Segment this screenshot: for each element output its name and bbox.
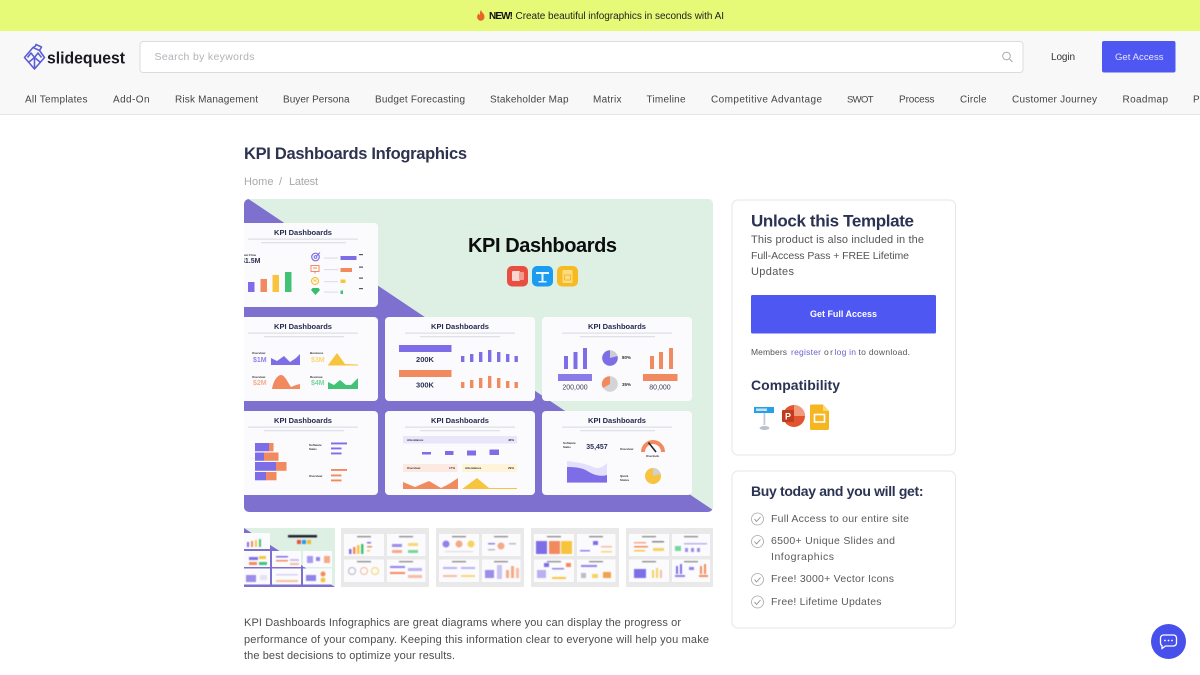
card: progress bars: [385, 317, 535, 401]
get full access button: [751, 295, 936, 334]
card: bars and pies: 80,000: [649, 384, 671, 392]
category navigation: All Templates: [25, 94, 88, 106]
logo: [24, 44, 125, 69]
benefit: lifetime updates: Free! Lifetime Updates: [771, 596, 882, 608]
panel: unlock this template: Unlock this Template: [751, 212, 914, 230]
category navigation: Risk Management: [175, 94, 258, 106]
card: gauge and area chart: Quick: [620, 474, 629, 478]
thumbnail 1: [244, 528, 335, 587]
icon: presentation: [311, 266, 319, 274]
unlock description: Full-Access Pass + FREE Lifetime: [751, 250, 909, 262]
thumbnail 2: [341, 528, 429, 587]
icon: powerpoint: [782, 405, 805, 427]
announcement banner: [0, 0, 1200, 31]
card: bar chart and icons: [236, 223, 378, 307]
main preview image: [236, 196, 713, 512]
card: attendance: 48%: [508, 438, 514, 442]
category navigation: Stakeholder Map: [490, 94, 569, 106]
benefit: slides: Infographics: [771, 551, 834, 563]
card: bar chart and icons: KPI Dashboards: [274, 228, 332, 237]
icon: gem: [311, 288, 320, 295]
breadcrumb: [244, 176, 318, 188]
announcement banner: Create beautiful infographics in seconds with AI: [516, 11, 724, 22]
unlock description: This product is also included in the: [751, 234, 924, 246]
category navigation: Circle: [960, 94, 987, 106]
card: gauge and area chart: Sales: [563, 445, 571, 449]
card: stacked bars: KPI Dashboards: [274, 416, 332, 425]
thumbnail 3: [436, 528, 524, 587]
card: stacked bars: [236, 411, 378, 495]
category navigation: SWOT: [847, 94, 874, 106]
card: gauge and area chart: [542, 411, 692, 495]
benefit: slides: [752, 535, 895, 563]
card: gauge and area chart: Software: [563, 441, 576, 445]
get access button: [1102, 41, 1176, 72]
gauge: [643, 442, 663, 458]
category navigation: Timeline: [646, 94, 686, 106]
card: attendance: 17%: [449, 466, 455, 470]
icon: target: [312, 252, 320, 261]
chat button: [1151, 624, 1186, 659]
members note: [751, 347, 910, 357]
get access button: Get Access: [1115, 52, 1164, 63]
card: gauge and area chart: Status: [620, 478, 630, 482]
members note: register: [791, 347, 821, 357]
unlock description: Updates: [751, 266, 794, 278]
card: area charts: $2M: [253, 380, 267, 387]
category navigation: Matrix: [593, 94, 622, 106]
card: gauge and area chart: Overview: [620, 447, 634, 451]
site header: [0, 31, 1200, 115]
card: area charts: KPI Dashboards: [274, 322, 332, 331]
panel: unlock this template: [732, 200, 956, 455]
logo: slidequest: [47, 50, 125, 68]
card: bars and pies: KPI Dashboards: [588, 322, 646, 331]
gauge: Overlook: [646, 454, 659, 458]
members note: log in: [834, 347, 856, 357]
card: bar chart and icons: ast Flow: [244, 253, 257, 257]
page title: KPI Dashboards Infographics: [244, 145, 467, 163]
card: area charts: $1M: [253, 357, 267, 364]
card: attendance: Attendance: [407, 438, 424, 442]
search box: Search by keywords: [154, 51, 254, 63]
benefit: vector icons: Free! 3000+ Vector Icons: [771, 573, 894, 585]
category navigation: Budget Forecasting: [375, 94, 465, 106]
app icons: [507, 266, 578, 286]
members note: or: [824, 347, 833, 357]
card: bars and pies: 80%: [622, 355, 631, 360]
search box: [140, 42, 1023, 72]
card: gauge and area chart: 35,457: [586, 444, 608, 451]
thumbnail 5: [626, 528, 713, 587]
category navigation: [25, 94, 1200, 106]
card: attendance: 29%: [508, 466, 514, 470]
card: attendance: KPI Dashboards: [431, 416, 489, 425]
card: area charts: Revenue: [310, 375, 323, 379]
icon: medal: [312, 278, 318, 284]
card: area charts: Business: [310, 351, 324, 355]
compatibility heading: Compatibility: [751, 377, 840, 393]
card: progress bars: KPI Dashboards: [431, 322, 489, 331]
card: attendance: [385, 411, 535, 495]
card: area charts: $3M: [311, 357, 325, 364]
login link: Login: [1051, 52, 1075, 63]
panel: buy today benefits: Buy today and you will get:: [751, 483, 924, 499]
card: area charts: Overview: [252, 351, 266, 355]
card: progress bars: 300K: [416, 380, 435, 390]
description paragraph: [244, 617, 709, 662]
card: gauge and area chart: KPI Dashboards: [588, 416, 646, 425]
benefit: slides: 6500+ Unique Slides and: [771, 535, 895, 547]
icon: google slides: [810, 404, 829, 430]
card: stacked bars: Overview: [309, 474, 323, 478]
card: area charts: [236, 317, 378, 401]
announcement banner: NEW!: [489, 11, 513, 22]
category navigation: Competitive Advantage: [711, 94, 822, 106]
card: attendance: Overview: [407, 466, 421, 470]
icon: keynote: [754, 407, 774, 430]
get full access button: Get Full Access: [810, 309, 877, 319]
category navigation: Process: [899, 94, 934, 106]
members note: Members: [751, 347, 787, 357]
thumbnail 4: [531, 528, 619, 587]
card: area charts: Overview: [252, 375, 266, 379]
preview title: KPI Dashboards: [468, 235, 617, 257]
card: stacked bars: Software: [309, 443, 322, 447]
description paragraph: performance of your company. Keeping this information clear to everyone will help you make: [244, 634, 709, 646]
card: stacked bars: Sales: [309, 447, 317, 451]
card: area charts: $4M: [311, 380, 325, 387]
breadcrumb: Home: [244, 176, 274, 188]
category navigation: Customer Journey: [1012, 94, 1097, 106]
breadcrumb: Latest: [289, 176, 318, 188]
benefit: full access: Full Access to our entire site: [771, 513, 909, 525]
card: bars and pies: 35%: [622, 382, 631, 387]
description paragraph: the best decisions to optimize your results.: [244, 650, 455, 662]
category navigation: Buyer Persona: [283, 94, 350, 106]
thumbnail strip: [244, 528, 713, 587]
unlock description: [751, 234, 924, 278]
breadcrumb: /: [279, 176, 283, 188]
members note: to download.: [858, 347, 910, 357]
card: bars and pies: 200,000: [562, 384, 588, 392]
card: bars and pies: [542, 317, 692, 401]
icon: powerpoint: P: [785, 412, 791, 422]
panel: buy today benefits: [732, 471, 956, 628]
category navigation: Roadmap: [1122, 94, 1168, 106]
card: progress bars: 200K: [416, 355, 435, 364]
card: attendance: Attendance: [465, 466, 482, 470]
description paragraph: KPI Dashboards Infographics are great diagrams where you can display the progress or: [244, 617, 681, 629]
card: bar chart and icons: $1.5M: [241, 258, 261, 265]
category navigation: Add-On: [113, 94, 150, 106]
